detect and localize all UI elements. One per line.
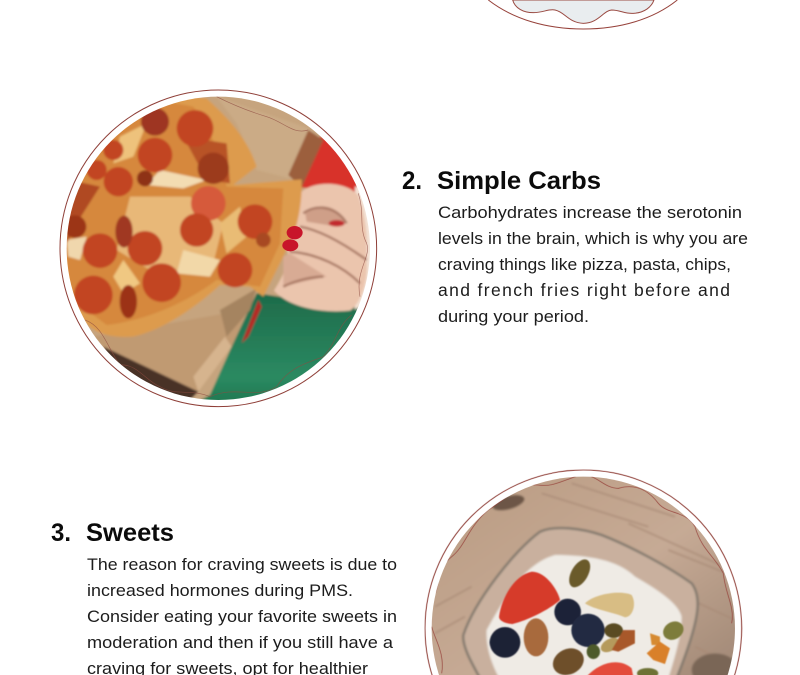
wood grain [436,483,724,633]
red accent between fingers [329,220,345,227]
pizza box background [84,96,358,400]
nuts and dried fruit [604,623,623,638]
right edge behind hand [355,187,372,310]
red strip [242,300,262,343]
text block: sweets description: The reason for craving sweets is due to [87,556,397,574]
finger shadows [283,208,367,287]
pizza crust main [75,98,304,338]
text block: sweets description [87,556,397,675]
strawberry [499,572,560,624]
photo: yogurt bowl with fruit and nuts in a circular frame [415,460,752,675]
box inner shade [246,132,306,175]
photo: pizza in a circular frame [60,90,378,408]
wavy inner line [432,475,732,673]
text block: sweets description: increased hormones during PMS. [87,582,353,600]
red nails [287,226,303,239]
strawberry slice [587,662,633,675]
green surface [200,292,358,400]
text block: simple carbs description [438,204,748,326]
heading: 3. Sweets: Sweets [86,519,174,547]
wooden table [432,476,735,675]
wavy inner line [85,97,368,397]
text block: simple carbs description: Carbohydrates increase the serotonin [438,204,742,222]
icon: partial food photo circle at top [488,0,677,29]
text block: simple carbs description: craving things like pizza, pasta, chips, [438,256,731,274]
pepperoni [64,108,272,318]
text block: simple carbs description: levels in the brain, which is why you are [438,230,748,248]
dark box corner [103,346,199,398]
text block: simple carbs description: during your period. [438,308,589,326]
blueberries [554,599,581,625]
almond [524,618,548,656]
heading: 3. Sweets: 3. [51,519,71,547]
glass bowl [463,528,698,675]
text block: sweets description: Consider eating your favorite sweets in [87,608,397,626]
heading: 2. Simple Carbs: 2. [402,167,422,195]
gap between fingers [304,208,344,226]
heading: 2. Simple Carbs: Simple Carbs [437,167,601,195]
box wall [288,130,323,187]
text block: simple carbs description: and french fries right before and [438,280,730,300]
yogurt [487,555,682,675]
pizza cheese [66,103,283,325]
cashew [585,593,634,617]
pistachio [568,558,591,588]
sauce patches [67,180,100,243]
text block: sweets description: moderation and then if you still have a [87,634,394,652]
cheese highlights [117,197,223,277]
lower box lid [96,315,242,390]
red surface [301,136,357,192]
wood knot [492,494,526,512]
hand [274,184,367,311]
